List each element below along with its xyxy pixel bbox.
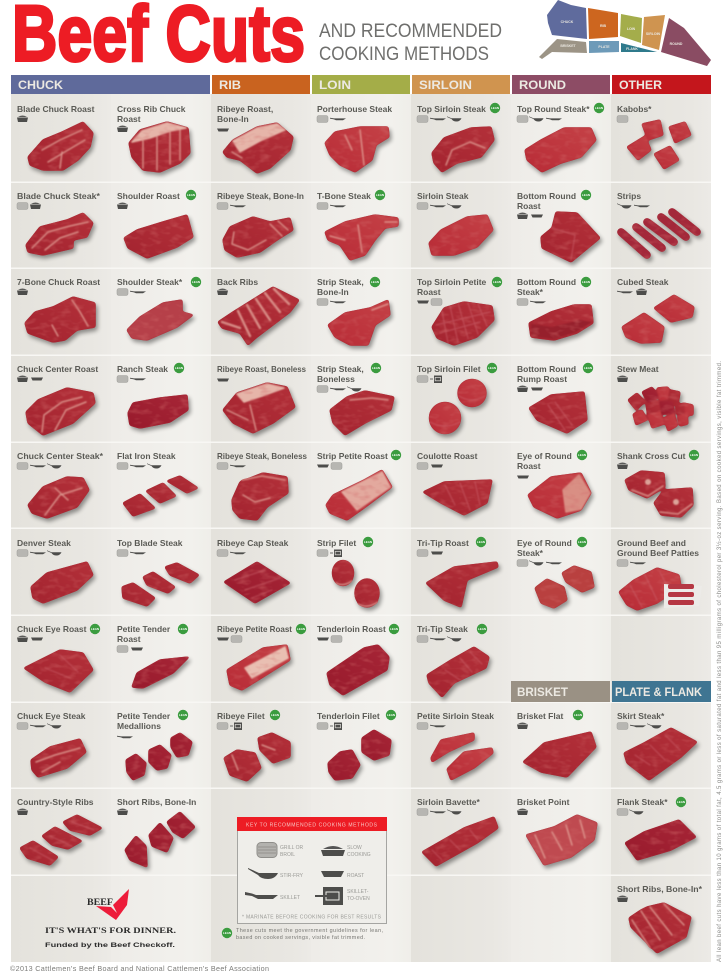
cell: Shoulder Steak <box>117 277 201 340</box>
key icons: SKILLET <box>280 895 300 901</box>
map: beef cow primal cut diagram: SIRLOIN <box>646 32 661 36</box>
cell: Chuck Eye Steak: Chuck Eye Steak <box>17 711 86 721</box>
cell: Skirt Steak: Skirt Steak* <box>617 711 665 721</box>
cell: Tenderloin Filet <box>317 710 396 780</box>
cell: Cubed Steak: Cubed Steak <box>617 277 669 287</box>
cell: Ribeye Steak, Bone-In <box>217 191 304 257</box>
cell: Top Sirloin Petite Roast <box>417 277 502 345</box>
cell: Porterhouse Steak: Porterhouse Steak <box>317 104 392 114</box>
cell: Bottom Round Rump Roast: Bottom Round <box>517 364 576 374</box>
cell: Bottom Round Roast: Bottom Round <box>517 191 576 201</box>
cell: Kabobs <box>617 104 691 169</box>
cell: 7-Bone Chuck Roast <box>17 277 100 342</box>
cell: Denver Steak <box>17 538 93 603</box>
cell: Cubed Steak <box>617 277 694 343</box>
cell: Top Sirloin Petite Roast: Top Sirloin Petite <box>417 277 487 287</box>
cell: Top Round Steak <box>517 103 604 172</box>
key icons: COOKING <box>347 852 371 858</box>
map: beef cow primal cut diagram <box>539 0 711 66</box>
cell: Stew Meat <box>617 364 693 431</box>
cell: Blade Chuck Steak <box>17 191 101 255</box>
key panel: recommended cooking methods <box>237 817 387 924</box>
cell: Chuck Eye Roast: Chuck Eye Roast <box>17 624 87 634</box>
cell: Chuck Center Steak: Chuck Center Steak* <box>17 451 104 461</box>
cell: Ribeye Steak, Boneless <box>217 451 307 520</box>
cell: Top Sirloin Steak <box>417 103 500 172</box>
map: beef cow primal cut diagram: FLANK <box>626 47 638 51</box>
cell: Tenderloin Roast: Tenderloin Roast <box>317 624 386 634</box>
cell: Shoulder Steak: Shoulder Steak* <box>117 277 183 287</box>
map: beef cow primal cut diagram: PLATE <box>598 45 610 49</box>
cell: Blade Chuck Steak: Blade Chuck Steak* <box>17 191 101 201</box>
cell: Top Sirloin Filet <box>417 363 497 434</box>
cell: Coulotte Roast: Coulotte Roast <box>417 451 478 461</box>
cell: Top Blade Steak: Top Blade Steak <box>117 538 183 548</box>
cell: Flank Steak: Flank Steak* <box>617 797 668 807</box>
cell: Eye of Round Steak <box>517 537 594 608</box>
cell: Flat Iron Steak: Flat Iron Steak <box>117 451 176 461</box>
logo: Beef It's What's For Dinner: IT'S WHAT'S FOR DINNER. <box>45 926 176 935</box>
cell: Short Ribs, Bone-In: Short Ribs, Bone-In <box>117 797 196 807</box>
cell: Top Sirloin Steak: Top Sirloin Steak <box>417 104 486 114</box>
key icons: BROIL <box>280 852 295 858</box>
cell: Chuck Center Roast: Chuck Center Roast <box>17 364 98 374</box>
cell: Skirt Steak <box>617 711 697 780</box>
key header: KEY TO RECOMMENDED COOKING METHODS <box>246 822 378 828</box>
cell: Ranch Steak: Ranch Steak <box>117 364 168 374</box>
cell: Tri-Tip Steak: Tri-Tip Steak <box>417 624 468 634</box>
cell: Strip Steak, Bone-In: Bone-In <box>317 287 349 297</box>
section headers <box>11 75 711 94</box>
cell: Petite Tender Roast <box>117 624 189 688</box>
key icons: SKILLET- <box>347 889 369 895</box>
cell: Flat Iron Steak <box>117 451 198 516</box>
cell: Strip Steak, Bone-In <box>317 277 390 345</box>
cell: Eye of Round Roast <box>517 450 591 518</box>
cell: Shank Cross Cut: Shank Cross Cut <box>617 451 686 461</box>
ground beef patties package <box>664 584 702 608</box>
section headers: OTHER <box>619 78 662 92</box>
cell: Ribeye Roast, Boneless <box>217 364 306 433</box>
cell: Blade Chuck Roast: Blade Chuck Roast <box>17 104 95 114</box>
cell: Cross Rib Chuck Roast: Cross Rib Chuck <box>117 104 186 114</box>
cell: Back Ribs: Back Ribs <box>217 277 258 287</box>
key icons: TO-OVEN <box>347 896 370 902</box>
cell: Flank Steak <box>617 797 696 860</box>
cell: Coulotte Roast <box>417 451 492 515</box>
cell: Back Ribs <box>217 277 299 345</box>
cell: Ribeye Cap Steak <box>217 538 290 603</box>
cell: Eye of Round Roast: Roast <box>517 461 541 471</box>
cell: Strip Steak, Boneless: Strip Steak, <box>317 364 364 374</box>
section headers: SIRLOIN <box>419 78 472 92</box>
lean legend <box>222 928 384 941</box>
map: beef cow primal cut diagram: RIB <box>600 24 606 28</box>
cell: 7-Bone Chuck Roast: 7-Bone Chuck Roast <box>17 277 100 287</box>
lean legend: based on cooked servings, visible fat trimmed. <box>236 935 365 941</box>
cell: Bottom Round Steak <box>517 277 593 340</box>
cell: Shoulder Roast: Shoulder Roast <box>117 191 180 201</box>
cell: Tri-Tip Roast: Tri-Tip Roast <box>417 538 469 548</box>
cell: Chuck Eye Roast <box>17 624 100 692</box>
cell: Eye of Round Steak: Steak* <box>517 548 544 558</box>
cell: Top Round Steak: Top Round Steak* <box>517 104 590 114</box>
cell: Strip Petite Roast <box>317 450 401 520</box>
key icons: ROAST <box>347 873 364 879</box>
cell: Ribeye Roast, Bone-In: Bone-In <box>217 114 249 124</box>
cell: Shank Cross Cut <box>617 450 699 517</box>
cell: Top Sirloin Petite Roast: Roast <box>417 287 441 297</box>
cell: Petite Tender Medallions: Medallions <box>117 721 161 731</box>
cell: Strip Steak, Boneless: Boneless <box>317 374 355 384</box>
cell: Eye of Round Roast: Eye of Round <box>517 451 572 461</box>
subtitle: COOKING METHODS <box>319 43 489 65</box>
section headers: LOIN <box>319 78 351 92</box>
cell: Strips <box>617 191 697 255</box>
copyright: ©2013 Cattlemen's Beef Board and National Cattlemen's Beef Association <box>10 964 269 973</box>
cell: Brisket Point: Brisket Point <box>517 797 570 807</box>
footnote: vertical nutrition disclaimer: All lean beef cuts have less than 10 grams of total fat, 4.5 grams or less of saturated fat and less than 95 milligrams of cholesterol per 3½-oz serving. Based on cooked servings, visible fat trimmed. <box>716 361 723 962</box>
cell: Short Ribs, Bone-In (plate) <box>617 884 703 953</box>
logo: Beef It's What's For Dinner <box>45 889 176 949</box>
cell: Blade Chuck Roast <box>17 104 95 170</box>
cell: Bottom Round Steak: Bottom Round <box>517 277 576 287</box>
cell: Brisket Flat <box>517 710 596 777</box>
cell: Ribeye Cap Steak: Ribeye Cap Steak <box>217 538 289 548</box>
subtitle <box>319 20 502 65</box>
logo: Beef It's What's For Dinner: Funded by the Beef Checkoff. <box>45 942 175 949</box>
cell: Short Ribs, Bone-In <box>117 797 196 867</box>
cell: Sirloin Bavette <box>417 797 498 866</box>
cell: Ribeye Filet: Ribeye Filet <box>217 711 265 721</box>
cell: Stew Meat: Stew Meat <box>617 364 659 374</box>
cell: Chuck Center Roast <box>17 364 98 435</box>
cell: Tri-Tip Roast <box>417 537 498 607</box>
cell: Ribeye Petite Roast <box>217 624 306 690</box>
cell: Brisket Point <box>517 797 597 865</box>
section headers: brisket and plate and flank: PLATE & FLANK <box>615 685 702 699</box>
cell: Petite Sirloin Steak: Petite Sirloin Steak <box>417 711 494 721</box>
cell: Strip Steak, Boneless <box>317 363 394 435</box>
cell: Ground Beef and Ground Beef Patties: Ground Beef Patties <box>617 548 699 558</box>
cell: Strip Petite Roast: Strip Petite Roast <box>317 451 388 461</box>
section headers: ROUND <box>519 78 566 92</box>
logo: Beef It's What's For Dinner: BEEF <box>87 897 114 907</box>
cell: Strip Filet <box>317 537 379 607</box>
cell: Chuck Center Steak <box>17 451 104 518</box>
cell: Bottom Round Roast: Roast <box>517 201 541 211</box>
cell: Eye of Round Steak: Eye of Round <box>517 538 572 548</box>
cell: Kabobs: Kabobs* <box>617 104 652 114</box>
cell: Ribeye Roast, Boneless: Ribeye Roast, Boneless <box>217 364 306 374</box>
cell: Porterhouse Steak <box>317 104 392 172</box>
cell: Denver Steak: Denver Steak <box>17 538 71 548</box>
section headers: CHUCK <box>18 78 63 92</box>
cell: Strips: Strips <box>617 191 641 201</box>
cell: Sirloin Steak: Sirloin Steak <box>417 191 469 201</box>
cell: Ribeye Roast, Bone-In <box>217 104 293 173</box>
cell: Petite Tender Roast: Roast <box>117 634 141 644</box>
cell: Country-Style Ribs <box>17 797 102 865</box>
cell: Sirloin Bavette: Sirloin Bavette* <box>417 797 481 807</box>
cell: Top Sirloin Filet: Top Sirloin Filet <box>417 364 481 374</box>
cell: Strip Filet: Strip Filet <box>317 538 356 548</box>
cell: Brisket Flat: Brisket Flat <box>517 711 563 721</box>
cell: Cross Rib Chuck Roast: Roast <box>117 114 141 124</box>
cell: Petite Tender Medallions <box>117 710 192 780</box>
cell: Sirloin Steak <box>417 191 493 255</box>
section headers: brisket and plate and flank: BRISKET <box>517 685 569 699</box>
cell: Top Blade Steak <box>117 538 199 606</box>
cell: Bottom Round Rump Roast: Rump Roast <box>517 374 567 384</box>
map: beef cow primal cut diagram: ROUND <box>670 42 683 46</box>
cell: Cross Rib Chuck Roast <box>117 104 190 172</box>
cell: Bottom Round Rump Roast <box>517 363 593 433</box>
map: beef cow primal cut diagram: LOIN <box>627 27 636 31</box>
key icons <box>245 842 371 905</box>
key footnote: * MARINATE BEFORE COOKING FOR BEST RESULTS <box>242 914 382 920</box>
cell: Chuck Eye Steak <box>17 711 86 777</box>
cell: Ranch Steak <box>117 363 188 428</box>
cell: Petite Sirloin Steak <box>417 711 494 780</box>
cell: Bottom Round Steak: Steak* <box>517 287 544 297</box>
cell: Ribeye Roast, Bone-In: Ribeye Roast, <box>217 104 273 114</box>
cell: T-Bone Steak: T-Bone Steak <box>317 191 371 201</box>
cell: Petite Tender Roast: Petite Tender <box>117 624 171 634</box>
cell: Shoulder Roast <box>117 190 196 258</box>
cell: Tri-Tip Steak <box>417 624 489 697</box>
cell: Ribeye Steak, Bone-In: Ribeye Steak, Bone-In <box>217 191 304 201</box>
cell: Ground Beef and Ground Beef Patties: Ground Beef and <box>617 538 686 548</box>
cell: Tenderloin Filet: Tenderloin Filet <box>317 711 380 721</box>
cell: T-Bone Steak <box>317 190 398 260</box>
lean legend: These cuts meet the government guidelines for lean, <box>236 928 384 934</box>
key header <box>237 817 387 831</box>
cell: Short Ribs, Bone-In (plate): Short Ribs, Bone-In* <box>617 884 703 894</box>
section headers: brisket and plate and flank <box>511 681 711 702</box>
subtitle: AND RECOMMENDED <box>319 20 502 42</box>
cell: Petite Tender Medallions: Petite Tender <box>117 711 171 721</box>
cell: Ground Beef and Ground Beef Patties <box>617 538 699 610</box>
map: beef cow primal cut diagram: BRISKET <box>560 44 577 48</box>
cell: Tenderloin Roast <box>317 624 399 695</box>
cell: Strip Steak, Bone-In: Strip Steak, <box>317 277 364 287</box>
cell: Ribeye Steak, Boneless: Ribeye Steak, Boneless <box>217 451 307 461</box>
key icons: SLOW <box>347 845 362 851</box>
key icons: GRILL OR <box>280 845 304 851</box>
cell: Country-Style Ribs: Country-Style Ribs <box>17 797 94 807</box>
cell: Ribeye Filet <box>217 710 290 781</box>
map: beef cow primal cut diagram: CHUCK <box>561 20 574 24</box>
section headers: RIB <box>219 78 241 92</box>
cell: Bottom Round Roast <box>517 190 600 262</box>
cell: Ribeye Petite Roast: Ribeye Petite Roast <box>217 624 292 634</box>
key icons: STIR-FRY <box>280 873 304 879</box>
